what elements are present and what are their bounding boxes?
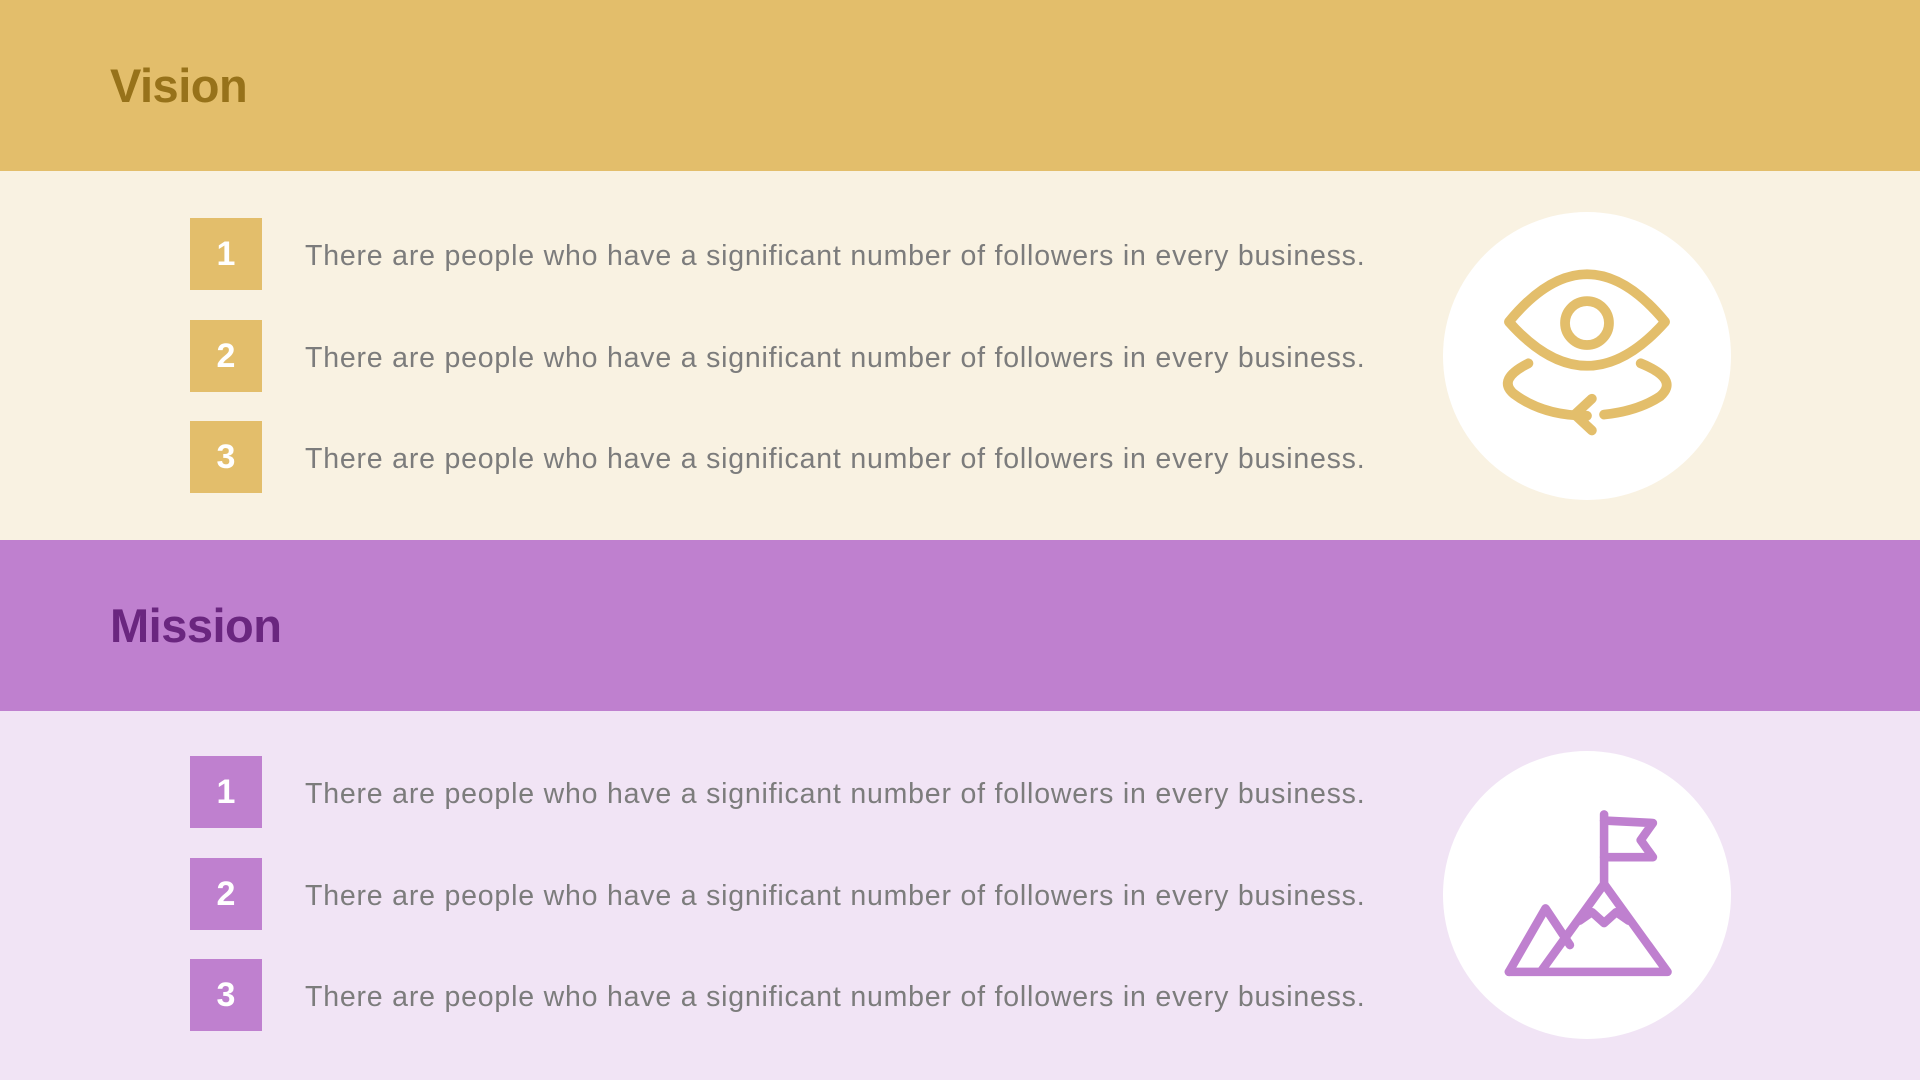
text 2: There are people who have a significant number of followers in every business.: [305, 342, 1365, 374]
text 1: There are people who have a significant number of followers in every business.: [305, 240, 1365, 272]
number 3: 3: [217, 976, 235, 1014]
number 2: [190, 320, 262, 392]
number 1: [190, 218, 262, 290]
title: mission: Mission: [110, 599, 281, 652]
number 3: [190, 959, 262, 1031]
text 2: There are people who have a significant number of followers in every business.: [305, 880, 1365, 912]
icon: mountain flag: [1443, 751, 1731, 1039]
text 3: There are people who have a significant number of followers in every business.: [305, 443, 1365, 475]
number 3: [190, 421, 262, 493]
panel: mission items: [0, 711, 1920, 1080]
number 1: 1: [217, 772, 235, 810]
number 2: [190, 858, 262, 930]
number 3: 3: [217, 438, 235, 476]
panel: vision items: [0, 171, 1920, 540]
text 3: There are people who have a significant number of followers in every business.: [305, 981, 1365, 1013]
number 2: 2: [217, 874, 235, 912]
header band: mission: [0, 540, 1920, 711]
number 1: [190, 756, 262, 828]
icon: eye: [1443, 212, 1731, 500]
number 2: 2: [217, 336, 235, 374]
title: vision: Vision: [110, 59, 247, 112]
header band: vision: [0, 0, 1920, 171]
number 1: 1: [217, 234, 235, 272]
text 1: There are people who have a significant number of followers in every business.: [305, 778, 1365, 810]
